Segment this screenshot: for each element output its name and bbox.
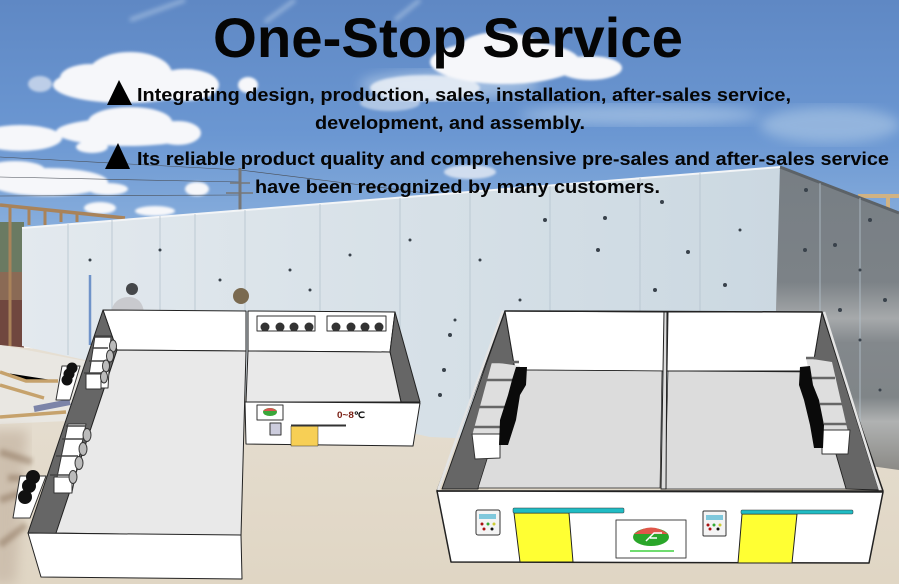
wooden framing xyxy=(0,196,899,348)
power lines and utility pole xyxy=(0,157,450,216)
front wall xyxy=(437,491,883,563)
text: bullet 1: development, and assembly. xyxy=(315,112,585,133)
temperature label: 0~8℃ xyxy=(337,410,365,420)
text: bullet 1: Integrating design, production, sales, installation, after-sales service, xyxy=(137,84,791,105)
evaporators right xyxy=(799,358,855,454)
door and controls xyxy=(257,405,346,446)
evaporators left xyxy=(467,362,527,459)
text: bullet 2: have been recognized by many customers. xyxy=(255,176,660,197)
logo panel xyxy=(616,520,686,558)
right controller xyxy=(703,511,726,536)
side evaporators upper xyxy=(84,336,116,389)
right sliding door xyxy=(738,510,853,563)
icon: triangle bullet xyxy=(107,80,132,105)
clouds xyxy=(0,32,622,216)
insulated cold-room wall xyxy=(22,167,899,470)
text: bullet 2: Its reliable product quality and comprehensive pre-sales and after-sales service xyxy=(137,148,889,169)
back walls xyxy=(505,311,822,371)
text: bullet 2 xyxy=(137,148,889,197)
outdoor condensers xyxy=(13,362,80,518)
text: bullet 1 xyxy=(137,84,791,133)
left controller xyxy=(476,510,500,535)
icon: triangle bullet xyxy=(105,143,130,169)
side walls xyxy=(442,311,879,490)
ground xyxy=(0,345,899,584)
cold room diagram: double room xyxy=(437,311,883,563)
back-wall evaporators xyxy=(257,316,386,332)
back room xyxy=(245,311,420,446)
long room xyxy=(28,310,246,579)
background photo: sky xyxy=(0,0,899,300)
bullet 1 xyxy=(107,80,791,133)
side evaporators lower xyxy=(50,424,91,493)
ground dirt, left xyxy=(0,345,90,584)
outer rim and divider xyxy=(437,311,883,491)
bullet 2 xyxy=(105,143,889,197)
cold room diagram: L-shaped xyxy=(13,310,420,579)
left sliding door xyxy=(513,508,624,562)
title: One-Stop Service xyxy=(213,6,683,69)
workers xyxy=(111,283,249,312)
floors xyxy=(478,370,846,489)
